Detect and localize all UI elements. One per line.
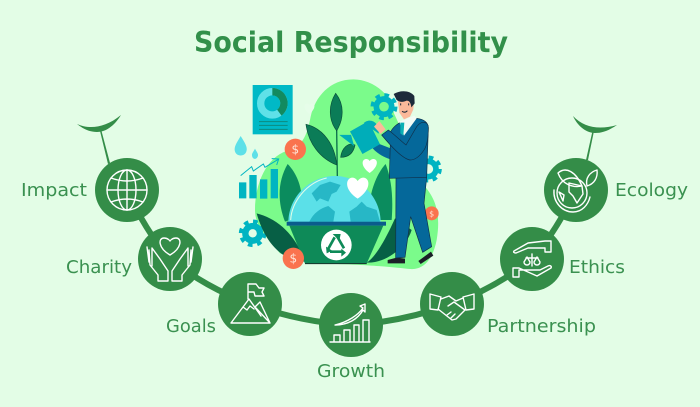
water drops bbox=[235, 136, 258, 159]
icon: hands with heart bbox=[147, 238, 193, 281]
hearts bbox=[347, 159, 377, 199]
green blob background bbox=[255, 79, 438, 269]
icon: mountain with flag bbox=[231, 284, 270, 323]
shirt and tie bbox=[399, 116, 417, 136]
right sprout bbox=[573, 116, 617, 160]
near arm bbox=[382, 122, 428, 160]
coins: $ bbox=[290, 252, 297, 266]
far arm bbox=[373, 144, 391, 159]
icon: earth with leaves bbox=[554, 170, 597, 212]
report card bbox=[253, 85, 293, 134]
node: Ecology bbox=[544, 158, 688, 222]
eyes and mouth bbox=[401, 103, 409, 112]
label: Ecology: Ecology bbox=[615, 180, 688, 201]
man in suit bbox=[341, 91, 433, 264]
title: Social Responsibility bbox=[194, 26, 508, 59]
label: Goals: Goals bbox=[166, 316, 216, 337]
gear: right behind man bbox=[417, 157, 440, 181]
left sprout bbox=[77, 115, 121, 164]
node: Goals bbox=[166, 272, 282, 337]
label: Charity: Charity bbox=[66, 257, 132, 278]
label: Impact: Impact bbox=[21, 180, 87, 201]
hair bbox=[394, 91, 415, 107]
shoes bbox=[388, 252, 433, 264]
gear: left bbox=[241, 221, 265, 245]
node: Partnership bbox=[420, 272, 596, 337]
node: Charity bbox=[66, 227, 202, 291]
head bbox=[398, 99, 414, 119]
coins: $ bbox=[429, 209, 434, 218]
icon: hands and scales bbox=[513, 241, 551, 277]
hand bbox=[374, 121, 386, 134]
label: Ethics: Ethics bbox=[569, 257, 625, 278]
watering can bbox=[341, 121, 379, 153]
trousers bbox=[396, 177, 432, 258]
pot with recycling badge bbox=[287, 222, 386, 264]
label: Partnership: Partnership bbox=[487, 316, 596, 337]
coins: $ bbox=[292, 143, 299, 157]
node: Growth bbox=[317, 293, 385, 382]
icon: growth chart bbox=[330, 304, 370, 342]
plant bbox=[306, 93, 355, 177]
central illustration: watering the globe plant bbox=[235, 79, 440, 269]
bar chart with arrow bbox=[239, 159, 279, 199]
node: Impact bbox=[21, 158, 159, 222]
icon: globe bbox=[107, 170, 147, 210]
gear: top bbox=[372, 95, 396, 118]
heart: small pale bbox=[304, 104, 314, 114]
back leaves bbox=[280, 164, 392, 222]
globe bbox=[288, 176, 381, 223]
node: Ethics bbox=[500, 227, 625, 291]
coins bbox=[283, 139, 439, 269]
bottom leaves bbox=[257, 213, 412, 263]
connector arc bbox=[127, 190, 576, 325]
jacket bbox=[389, 118, 428, 178]
icon: handshake bbox=[430, 294, 474, 320]
label: Growth: Growth bbox=[317, 361, 385, 382]
